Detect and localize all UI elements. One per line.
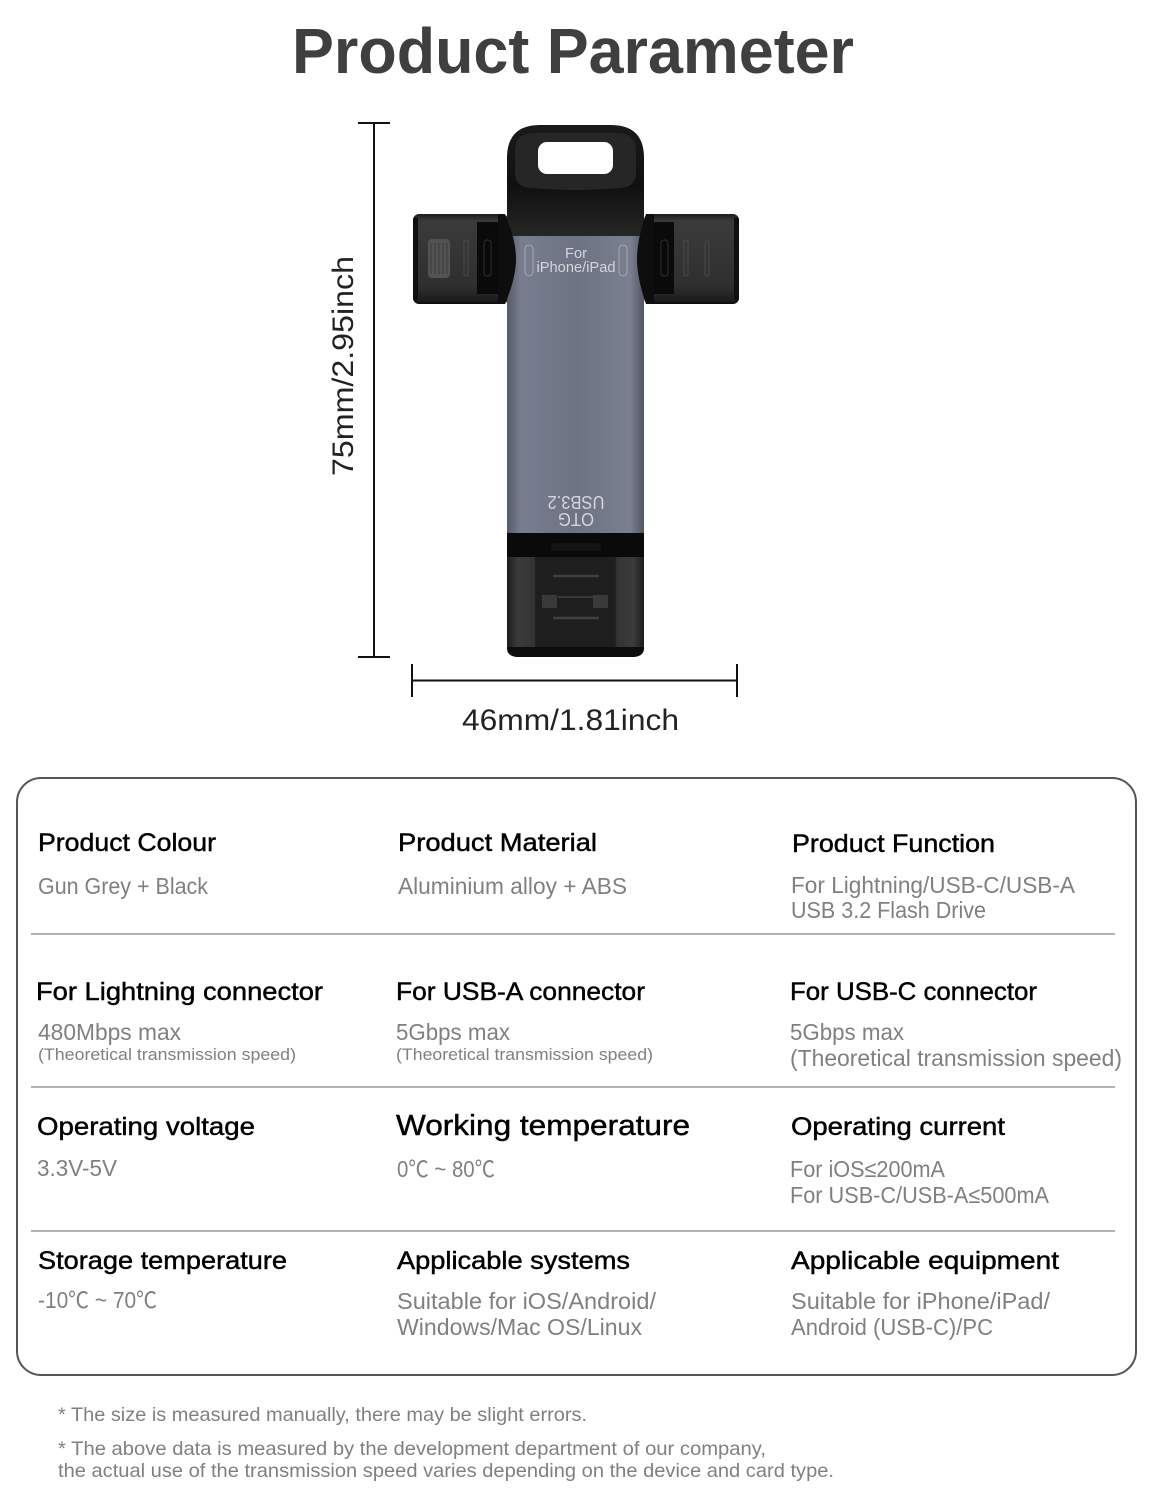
spec: working temperature (396, 1110, 690, 1182)
spec: product material: Aluminium alloy + ABS (398, 873, 627, 899)
body upside-down label (548, 492, 604, 529)
spec: lightning connector: (Theoretical transmission speed) (38, 1045, 296, 1064)
parameter panel (17, 778, 1136, 1375)
spec: usb-c connector (790, 978, 1122, 1071)
footnotes: * The above data is measured by the development department of our company, (58, 1438, 766, 1460)
spec: product function: For Lightning/USB-C/USB-A (791, 872, 1076, 898)
left cap: Lightning (413, 214, 508, 304)
spec: applicable systems: Applicable systems (397, 1247, 630, 1275)
spec: applicable equipment: Suitable for iPhone/iPad/ (791, 1288, 1051, 1314)
spec: operating current: For USB-C/USB-A≤500mA (790, 1182, 1050, 1208)
black top with key loop (507, 125, 644, 236)
spec: applicable equipment: Applicable equipment (791, 1247, 1059, 1275)
dimension: width: 46mm/1.81inch (462, 704, 679, 737)
spec: operating voltage (37, 1113, 255, 1181)
dimension: width (412, 664, 737, 737)
title: Product Parameter (292, 15, 854, 87)
right cap: USB-C (644, 214, 739, 304)
body ornament: port outlines and label: iPhone/iPad (536, 259, 616, 276)
spec: operating current: Operating current (791, 1113, 1005, 1141)
spec: product function (791, 830, 1076, 923)
body ornament: port outlines and label (525, 245, 627, 276)
spec: applicable equipment (791, 1247, 1059, 1340)
spec: usb-a connector: 5Gbps max (396, 1019, 510, 1045)
spec: working temperature: 0℃ ~ 80℃ (397, 1156, 495, 1182)
spec: product colour (38, 829, 216, 899)
spec: applicable systems: Windows/Mac OS/Linux (397, 1314, 643, 1340)
spec: operating current: For iOS≤200mA (790, 1156, 946, 1182)
spec: operating current (790, 1113, 1050, 1208)
spec: usb-c connector: For USB-C connector (790, 978, 1037, 1006)
bottom cap: USB-A (507, 533, 644, 657)
spec: usb-a connector (396, 978, 653, 1064)
spec: product colour: Gun Grey + Black (38, 873, 208, 899)
spec: storage temperature: -10℃ ~ 70℃ (38, 1287, 157, 1313)
body upside-down label: OTG (558, 509, 594, 529)
spec: storage temperature (38, 1247, 287, 1313)
footnotes (58, 1404, 834, 1482)
spec: applicable systems: Suitable for iOS/Android/ (397, 1288, 657, 1314)
spec: usb-a connector: (Theoretical transmission speed) (396, 1045, 653, 1064)
spec: product colour: Product Colour (38, 829, 216, 857)
spec: product function: USB 3.2 Flash Drive (791, 897, 986, 923)
spec: lightning connector: 480Mbps max (38, 1019, 181, 1045)
spec: working temperature: Working temperature (396, 1110, 690, 1142)
body ornament: port outlines and label: For (565, 245, 587, 262)
spec: product material: Product Material (398, 829, 597, 857)
cap collars (498, 214, 654, 304)
spec: usb-c connector: 5Gbps max (790, 1019, 904, 1045)
product illustration: flash drive (413, 125, 739, 657)
spec: storage temperature: Storage temperature (38, 1247, 287, 1275)
spec: usb-a connector: For USB-A connector (396, 978, 645, 1006)
metal body (507, 230, 644, 540)
spec: product function: Product Function (792, 830, 995, 858)
spec: applicable systems (397, 1247, 657, 1340)
spec: operating voltage: 3.3V-5V (37, 1155, 118, 1181)
footnotes: the actual use of the transmission speed varies depending on the device and card type. (58, 1460, 834, 1482)
spec: operating voltage: Operating voltage (37, 1113, 255, 1141)
dimension: height (327, 123, 390, 657)
body upside-down label: USB3.2 (548, 492, 604, 512)
spec: product material (398, 829, 627, 899)
spec: usb-c connector: (Theoretical transmission speed) (790, 1045, 1122, 1071)
dimension: height: 75mm/2.95inch (327, 256, 360, 476)
footnotes: * The size is measured manually, there may be slight errors. (58, 1404, 587, 1426)
spec: lightning connector (36, 978, 323, 1064)
spec: applicable equipment: Android (USB-C)/PC (791, 1314, 993, 1340)
spec: lightning connector: For Lightning connector (36, 978, 323, 1006)
